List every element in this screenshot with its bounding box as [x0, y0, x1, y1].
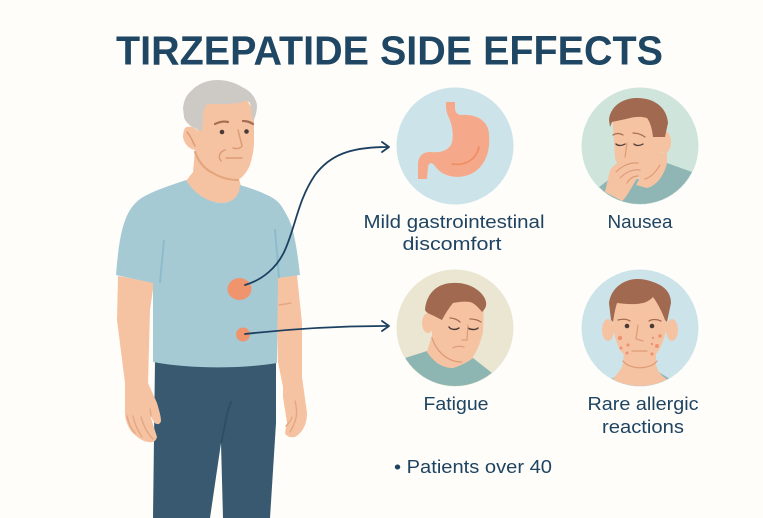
panel: gastrointestinal discomfort	[364, 88, 544, 254]
panel: rare allergic reactions	[582, 270, 698, 437]
note: patients over 40: • Patients over 40	[394, 457, 552, 477]
figure: older man	[116, 80, 307, 518]
marker: abdomen	[228, 278, 252, 300]
left arm	[117, 276, 161, 442]
hair	[183, 80, 257, 132]
label line 2: discomfort	[402, 233, 502, 254]
title: TIRZEPATIDE SIDE EFFECTS	[116, 28, 663, 74]
icon: nauseous man	[599, 98, 692, 204]
label line 2: reactions	[602, 416, 684, 437]
icon: man with rash	[602, 279, 678, 395]
pants crease	[221, 401, 232, 443]
icon: stomach	[418, 102, 489, 179]
chin shadow	[195, 152, 238, 180]
shirt fold lines	[160, 229, 279, 283]
eyes	[220, 130, 224, 134]
marker: lower abdomen	[236, 328, 250, 342]
eyebrows	[215, 121, 253, 124]
icon: tired man	[405, 283, 492, 395]
label: Fatigue	[424, 393, 488, 414]
arrow: abdomen to stomach	[245, 142, 389, 285]
icon circle	[396, 88, 514, 204]
right arm	[276, 275, 307, 437]
nose and mouth	[187, 130, 242, 161]
icon circle	[396, 270, 514, 386]
label: Mild gastrointestinal	[364, 211, 544, 232]
label: Rare allergic	[588, 393, 698, 414]
panel: nausea	[582, 88, 700, 232]
stomach fold	[452, 147, 479, 164]
pants	[153, 360, 276, 518]
face	[195, 100, 254, 180]
shirt	[116, 180, 300, 367]
neck	[186, 150, 241, 203]
label: Nausea	[608, 211, 673, 232]
panel: fatigue	[396, 270, 514, 414]
arrow: lower abdomen to fatigue	[245, 321, 389, 334]
icon circle	[582, 88, 698, 204]
icon circle	[582, 270, 698, 386]
ear	[183, 127, 197, 150]
head	[183, 80, 257, 180]
hand and arm detail lines	[127, 303, 297, 439]
